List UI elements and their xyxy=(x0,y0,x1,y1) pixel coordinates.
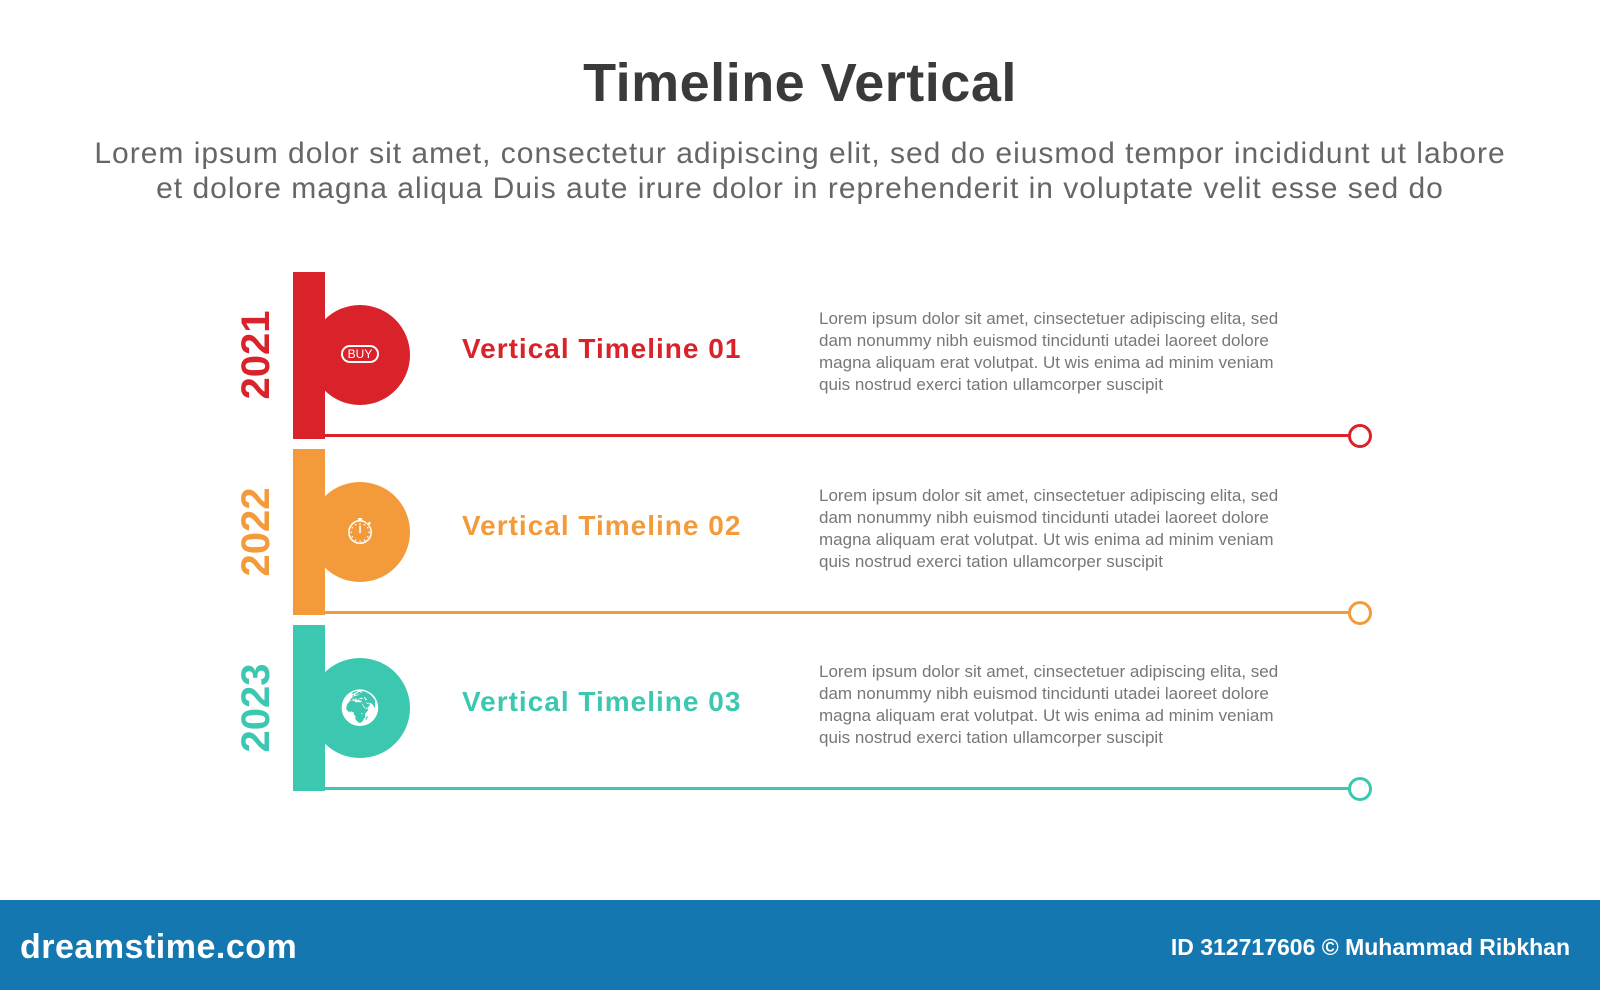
icon: stopwatch circle xyxy=(310,482,410,582)
heading: Vertical Timeline 03 xyxy=(462,686,741,717)
subtitle xyxy=(94,137,1506,205)
line with end circle xyxy=(325,787,1349,790)
subtitle: Lorem ipsum dolor sit amet, consectetur adipiscing elit, sed do eiusmod tempor incididunt ut labore xyxy=(94,137,1506,170)
text: Lorem ipsum dolor sit amet, cinsectetuer adipiscing elita, sed dam nonummy nibh euismod tincidunti utadei laoreet dolore magna aliquam erat volutpat. Ut wis enima ad minim veniam quis nostrud exerci tation ullamcorper suscipit xyxy=(819,662,1278,747)
heading: Vertical Timeline 02 xyxy=(462,510,741,541)
year 2022: 2022 xyxy=(234,488,278,576)
row 1: 2021 xyxy=(234,272,1372,448)
title: Timeline Vertical xyxy=(583,53,1017,113)
row 2: 2022 xyxy=(234,449,1372,625)
bar xyxy=(293,272,325,439)
icon: globe circle xyxy=(310,658,410,758)
icon: buy circle xyxy=(310,305,410,405)
icon: globe circle: 🌍︎ xyxy=(337,687,383,728)
text: Lorem ipsum dolor sit amet, cinsectetuer adipiscing elita, sed dam nonummy nibh euismod tincidunti utadei laoreet dolore magna aliquam erat volutpat. Ut wis enima ad minim veniam quis nostrud exerci tation ullamcorper suscipit xyxy=(819,309,1278,394)
subtitle: et dolore magna aliqua Duis aute irure dolor in reprehenderit in voluptate velit esse sed do xyxy=(156,172,1444,205)
bar xyxy=(293,625,325,791)
icon: buy circle: BUY xyxy=(348,347,372,361)
footer logo: dreamstime.com xyxy=(20,928,297,966)
bar xyxy=(293,449,325,615)
line with end circle xyxy=(325,434,1349,437)
heading: Vertical Timeline 01 xyxy=(462,333,741,364)
icon: stopwatch circle: ⏱ xyxy=(346,511,374,552)
text: Lorem ipsum dolor sit amet, cinsectetuer adipiscing elita, sed dam nonummy nibh euismod tincidunti utadei laoreet dolore magna aliquam erat volutpat. Ut wis enima ad minim veniam quis nostrud exerci tation ullamcorper suscipit xyxy=(819,486,1278,571)
footer credit: ID 312717606 © Muhammad Ribkhan xyxy=(1171,934,1570,960)
row 3: 2023 xyxy=(234,625,1372,801)
footer xyxy=(0,900,1600,990)
year 2021: 2021 xyxy=(234,311,278,400)
year 2023: 2023 xyxy=(234,664,278,752)
line with end circle xyxy=(325,611,1349,614)
